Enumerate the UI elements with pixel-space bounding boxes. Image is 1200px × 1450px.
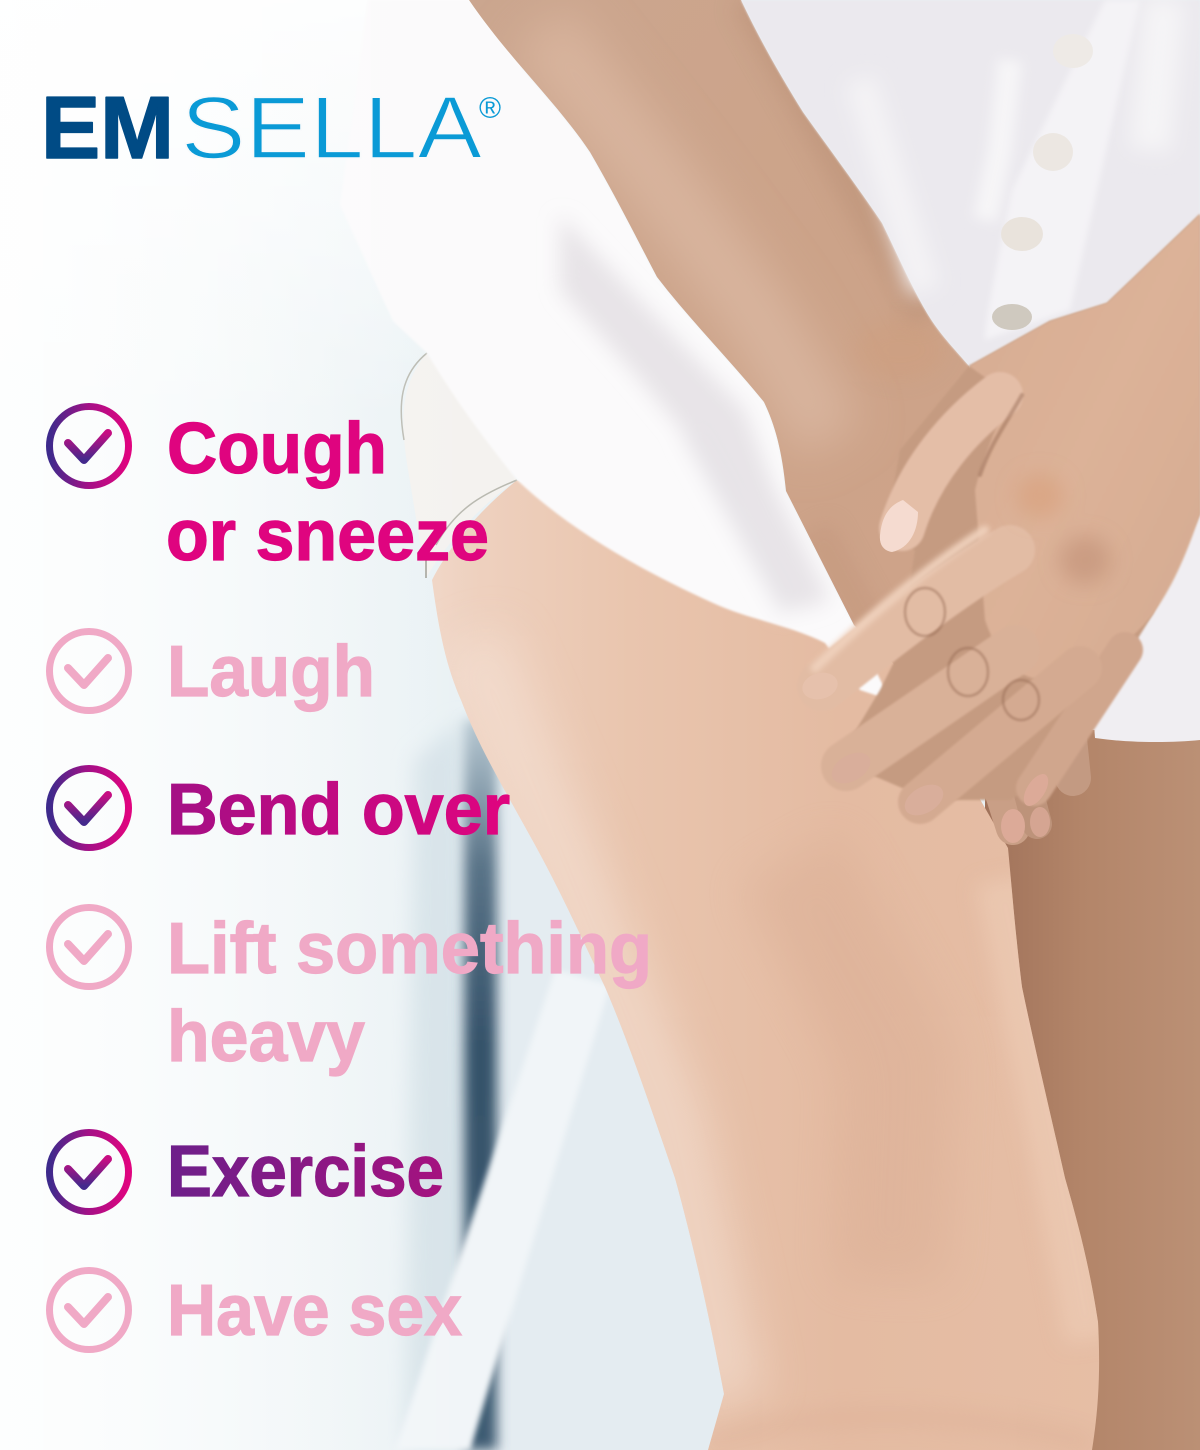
knee crease <box>708 1417 1092 1445</box>
label: Lift something: Lift something <box>167 909 652 989</box>
shirt fold shading <box>560 215 830 610</box>
forearm highlight <box>540 30 830 440</box>
icon: active check <box>50 406 128 486</box>
list item: Laugh <box>50 632 375 712</box>
icon: muted check <box>50 632 128 710</box>
rear thigh <box>985 730 1200 1450</box>
undergarment area <box>403 353 517 578</box>
list item: Cough or sneeze <box>50 406 489 576</box>
label: Laugh: Laugh <box>167 632 375 712</box>
icon: muted check <box>50 908 128 986</box>
shirt buttons <box>992 34 1093 330</box>
fingernails <box>799 500 1053 843</box>
registered mark: ® <box>479 92 501 125</box>
label: Bend over: Bend over <box>167 770 510 850</box>
finger creases <box>905 395 1039 720</box>
middle finger <box>846 650 1015 766</box>
thumb <box>902 395 1000 528</box>
thigh centre shading <box>790 860 900 1280</box>
logo bold part: EM <box>41 78 174 177</box>
back of hand <box>969 214 1200 680</box>
index finger <box>822 550 1010 686</box>
white fade overlay <box>0 0 480 1450</box>
icon: active check <box>50 768 128 848</box>
wrist warm tone <box>855 320 945 380</box>
icon: active check <box>50 1132 128 1212</box>
front thigh <box>420 470 1120 1450</box>
thigh right highlight <box>1000 880 1090 1340</box>
index finger highlight <box>815 530 985 668</box>
shirt right panel <box>741 0 1200 366</box>
label: Exercise: Exercise <box>167 1132 444 1212</box>
shirt left panel <box>340 0 890 700</box>
undergarment seams <box>401 353 517 578</box>
list item: Bend over <box>50 768 510 850</box>
logo: EMSELLA <box>41 78 501 177</box>
thigh left highlight <box>470 640 730 1400</box>
list item: Lift something heavy <box>50 908 652 1077</box>
forearm upper shading <box>745 0 925 320</box>
label: heavy: heavy <box>167 997 365 1077</box>
label: Have sex: Have sex <box>167 1271 462 1351</box>
palm shadow <box>808 536 854 624</box>
list item: Have sex <box>50 1270 462 1351</box>
shirt placket and highlights <box>860 0 1165 340</box>
logo light part: SELLA <box>181 78 482 177</box>
knuckle tone <box>1016 474 1111 584</box>
hidden hand fingers <box>985 700 1073 828</box>
pinky finger <box>1034 650 1125 788</box>
icon: muted check <box>50 1270 128 1350</box>
shirt base behind the hand <box>1090 500 1200 742</box>
label: Cough: Cough <box>167 409 387 489</box>
list item: Exercise <box>50 1132 444 1212</box>
ring finger <box>920 668 1080 802</box>
hand silhouette base <box>850 214 1200 800</box>
label: or sneeze: or sneeze <box>166 496 489 576</box>
forearm <box>469 0 969 664</box>
